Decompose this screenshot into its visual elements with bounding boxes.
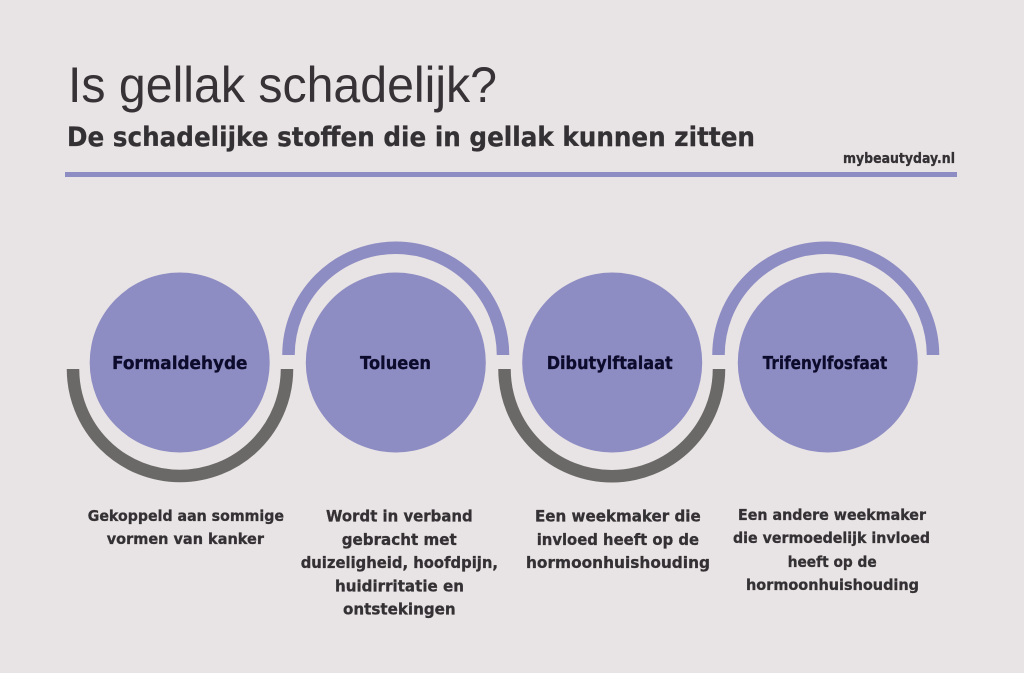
step 2: Tolueen [288, 248, 503, 452]
circle 1 [90, 272, 270, 452]
header rule [65, 172, 957, 177]
subtitle: De schadelijke stoffen die in gellak kunnen zitten [67, 122, 755, 153]
description: Trifenylfosfaat: die vermoedelijk invloed [733, 529, 930, 547]
label 2: Tolueen [360, 354, 431, 374]
description: Tolueen [301, 506, 498, 618]
label 4: Trifenylfosfaat [763, 354, 887, 374]
circle 3 [522, 272, 702, 452]
description: Tolueen: ontstekingen [343, 600, 456, 618]
description: Formaldehyde: Gekoppeld aan sommige [88, 507, 284, 525]
description: Trifenylfosfaat [733, 506, 930, 594]
arc: upper purple 4 [718, 248, 933, 355]
circle 2 [306, 272, 486, 452]
description: Tolueen: huidirritatie en [335, 576, 464, 596]
description: Formaldehyde: vormen van kanker [107, 530, 265, 548]
description: Trifenylfosfaat: Een andere weekmaker [738, 506, 927, 524]
description: Trifenylfosfaat: hormoonhuishouding [746, 576, 919, 594]
label 1: Formaldehyde [112, 354, 248, 374]
description: Dibutylftalaat: hormoonhuishouding [526, 553, 710, 572]
step 1: Formaldehyde [73, 272, 287, 476]
description: Dibutylftalaat: invloed heeft op de [537, 530, 699, 549]
description: Formaldehyde [88, 507, 284, 548]
label 3: Dibutylftalaat [547, 354, 673, 374]
title: Is gellak schadelijk? [68, 57, 497, 113]
step 3: Dibutylftalaat [504, 272, 719, 476]
description: Dibutylftalaat: Een weekmaker die [535, 506, 701, 526]
description: Tolueen: gebracht met [342, 530, 457, 549]
arc: lower grey 1 [73, 369, 287, 476]
website credit: mybeautyday.nl [843, 151, 955, 167]
description: Dibutylftalaat [526, 506, 710, 572]
description: Tolueen: Wordt in verband [326, 506, 473, 526]
description: Trifenylfosfaat: heeft op de [788, 553, 877, 571]
description: Tolueen: duizeligheid, hoofdpijn, [301, 553, 498, 572]
circle 4 [738, 272, 918, 452]
arc: lower grey 3 [504, 369, 719, 476]
step 4: Trifenylfosfaat [718, 248, 933, 452]
arc: upper purple 2 [288, 248, 503, 355]
